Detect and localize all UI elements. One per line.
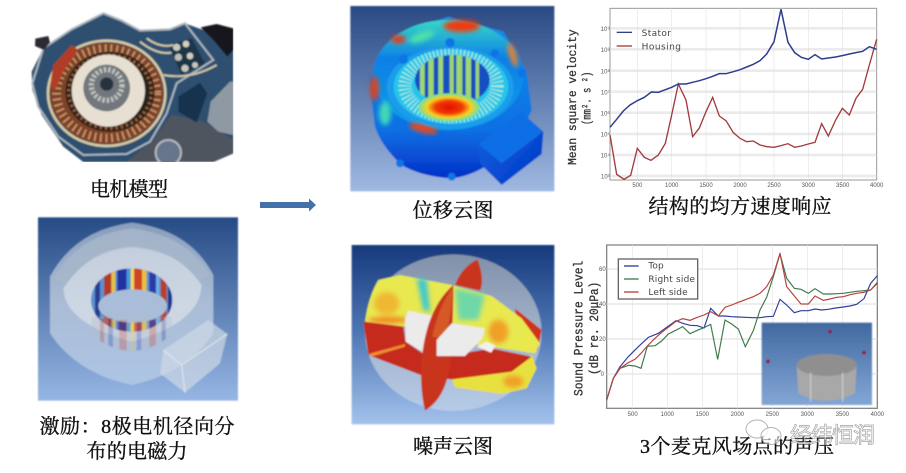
y axis unit: (mm². s ²) bbox=[581, 72, 595, 125]
terminal box top bbox=[478, 113, 543, 163]
yellow upper field plane bbox=[365, 275, 540, 353]
winding strands bbox=[57, 49, 157, 138]
excitation stripes lower, seen through housing bbox=[92, 317, 172, 355]
panel: noise contour bbox=[352, 245, 554, 424]
legend bbox=[617, 29, 681, 52]
left side line bbox=[607, 253, 877, 400]
terminal box bbox=[478, 113, 543, 185]
caption: displacement contour: 位移云图 bbox=[412, 199, 494, 222]
flange bumps bbox=[396, 38, 526, 181]
legend bbox=[618, 259, 698, 299]
stator teeth bbox=[405, 55, 497, 117]
dark ribs bbox=[178, 83, 207, 123]
caption: motor model: 电机模型 bbox=[90, 178, 168, 201]
x axis ticks: 4000 bbox=[870, 183, 884, 189]
x axis ticks: 3000 bbox=[801, 412, 815, 418]
arrow bbox=[260, 198, 316, 212]
x axis ticks: 1500 bbox=[699, 183, 713, 189]
mounting plate bbox=[207, 82, 233, 135]
x axis ticks: 500 bbox=[632, 183, 643, 189]
x axis ticks: 4000 bbox=[871, 412, 885, 418]
y axis ticks: 10³ bbox=[601, 175, 610, 181]
legend: Right side bbox=[648, 275, 695, 285]
round boss bbox=[156, 140, 181, 165]
y axis ticks: 0 bbox=[601, 372, 605, 378]
meshed motor bbox=[797, 357, 857, 401]
x axis ticks bbox=[628, 412, 885, 418]
panel: motor photo bbox=[32, 13, 233, 165]
watermark text: 经纬恒润 bbox=[790, 423, 875, 448]
x axis ticks: 1000 bbox=[665, 183, 679, 189]
stator yoke bbox=[387, 47, 514, 128]
x axis ticks: 1500 bbox=[696, 412, 710, 418]
plot frame and grid bbox=[610, 8, 877, 180]
caption: excitation: 激励：8极电机径向分 bbox=[40, 415, 234, 438]
housing line bbox=[610, 39, 877, 179]
white motor block left bbox=[405, 311, 433, 353]
black cable end right bbox=[201, 24, 233, 57]
legend: Housing bbox=[642, 42, 681, 52]
chart: mean square velocity bbox=[566, 8, 884, 189]
x axis ticks: 2500 bbox=[767, 183, 781, 189]
black clip left bbox=[35, 36, 50, 50]
white motor block right bbox=[437, 323, 485, 356]
hot floor bbox=[418, 93, 480, 121]
lens highlight bbox=[432, 287, 453, 340]
legend: Top bbox=[647, 262, 664, 272]
x axis ticks: 3500 bbox=[836, 412, 850, 418]
inset: microphone positions bbox=[762, 323, 872, 405]
y axis title: Sound Pressure Level bbox=[572, 261, 587, 396]
panel: displacement contour bbox=[350, 6, 554, 191]
hot patches on rim bbox=[370, 20, 520, 136]
caption: velocity response: 结构的均方速度响应 bbox=[648, 195, 832, 218]
y axis ticks: 10⁸ bbox=[601, 68, 610, 75]
stator teeth bbox=[65, 52, 155, 132]
housing body bbox=[50, 223, 213, 385]
background bbox=[352, 245, 554, 424]
red plane bbox=[363, 322, 532, 379]
shaft bore bbox=[100, 77, 113, 91]
y axis ticks: 60 bbox=[599, 267, 606, 273]
y axis ticks: 10⁷ bbox=[601, 89, 610, 96]
housing rim bbox=[32, 13, 213, 155]
housing body bbox=[369, 17, 532, 178]
stator winding outer bbox=[48, 41, 165, 146]
legend: Stator bbox=[642, 29, 671, 39]
x axis ticks: 1000 bbox=[661, 412, 675, 418]
x axis ticks: 2500 bbox=[766, 412, 780, 418]
orange streak bbox=[368, 344, 405, 357]
hub bbox=[83, 65, 130, 111]
icon: wechat bubbles bbox=[746, 420, 781, 444]
vertical red plane top bbox=[455, 259, 482, 291]
white rotor ring bbox=[72, 55, 145, 127]
chart: sound pressure level bbox=[572, 245, 885, 418]
excitation stripes upper bbox=[90, 267, 173, 333]
caption: noise contour: 噪声云图 bbox=[413, 435, 493, 458]
y axis ticks: 10⁴ bbox=[601, 153, 610, 160]
ring floor bbox=[98, 289, 167, 323]
white terminal box bbox=[477, 342, 496, 353]
top line bbox=[607, 276, 877, 400]
x axis ticks: 500 bbox=[628, 412, 638, 418]
terminal box edges bbox=[163, 334, 227, 393]
background bbox=[350, 6, 554, 191]
x axis ticks bbox=[632, 183, 884, 189]
stator line bbox=[610, 9, 877, 127]
watermark bbox=[746, 420, 875, 448]
terminal box bbox=[160, 320, 227, 393]
red coil bbox=[50, 45, 78, 90]
x axis ticks: 2000 bbox=[733, 183, 747, 189]
x axis ticks: 2000 bbox=[731, 412, 745, 418]
y axis title: Mean square velocity bbox=[566, 29, 580, 165]
cyan patches bbox=[368, 278, 508, 344]
vertical red lens bbox=[421, 285, 453, 411]
y axis ticks: 10⁹ bbox=[601, 26, 610, 33]
bore wall stripes bbox=[418, 54, 480, 100]
y axis unit: (dB re. 20μPa) bbox=[587, 282, 602, 375]
y axis ticks: 20 bbox=[599, 337, 606, 343]
stator bore wall bbox=[415, 55, 490, 105]
y axis ticks: 10⁸ bbox=[601, 47, 610, 54]
x axis ticks: 3500 bbox=[836, 183, 850, 189]
right side line bbox=[607, 254, 877, 400]
stator yoke top bbox=[394, 49, 508, 124]
plot frame and grid bbox=[607, 245, 877, 408]
bearing bbox=[91, 70, 122, 100]
copper winding bbox=[50, 43, 163, 144]
y axis ticks: 10⁶ bbox=[601, 110, 610, 117]
panel: excitation model bbox=[38, 217, 238, 401]
x axis ticks: 3000 bbox=[802, 183, 816, 189]
field sphere bbox=[365, 254, 542, 411]
back wall band bbox=[373, 20, 524, 130]
caption: excitation line 2: 布的电磁力 bbox=[86, 440, 188, 463]
lower gearbox casting bbox=[127, 115, 233, 162]
motor housing bbox=[32, 13, 233, 162]
y axis ticks: 10⁵ bbox=[601, 132, 610, 139]
y axis ticks bbox=[599, 267, 606, 378]
legend: Left side bbox=[648, 288, 688, 298]
caption: microphone sound pressure: 3个麦克风场点的声压 bbox=[640, 435, 834, 458]
back wall shade bbox=[53, 228, 210, 285]
inner wall bbox=[63, 246, 202, 342]
background bbox=[38, 217, 238, 401]
y axis ticks bbox=[601, 26, 610, 181]
red plane right edge bbox=[515, 308, 542, 350]
yellow lower field plane bbox=[452, 355, 537, 394]
y axis ticks: 40 bbox=[599, 302, 606, 308]
terminal block bbox=[140, 38, 217, 76]
microphone points bbox=[828, 330, 832, 334]
lower plane hot speckle bbox=[503, 376, 523, 388]
